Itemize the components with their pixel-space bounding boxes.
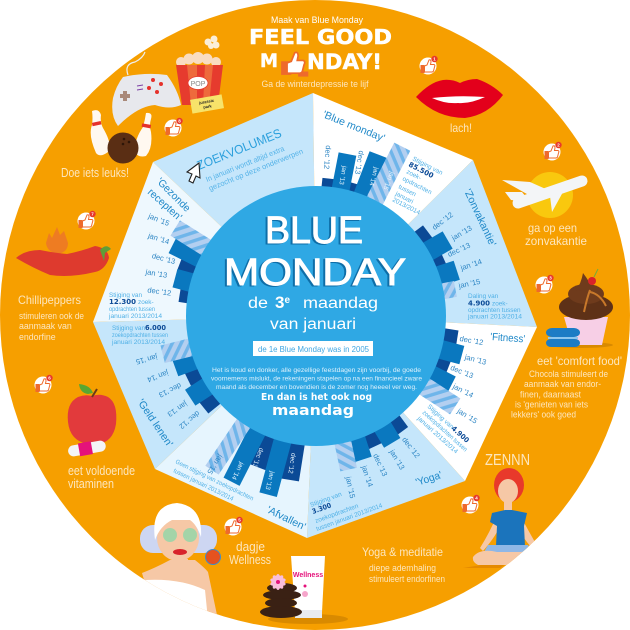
label: doe iets leuks: Doe iets leuks! <box>61 165 129 180</box>
text: comfort food: eet 'comfort food' <box>537 354 622 368</box>
icon: drink <box>206 550 220 564</box>
text: yoga stat: 3.300 <box>311 501 333 516</box>
text: blue monday stat: Stijging van <box>411 156 444 177</box>
title: blue monday <box>224 210 406 294</box>
bar labels: fitness: jan '14 <box>450 381 475 400</box>
text: explanation: Het is koud en donker, alle gezellige feestdagen zijn voorbij, de goede <box>212 367 421 374</box>
icon: thumb badge 8: 8 <box>178 118 181 124</box>
text: comfort food: lekkers' ook goed <box>511 410 576 420</box>
text: explanation: voornemens mislukt, de rekeningen stapelen op na een financieel zware <box>211 376 422 382</box>
bar labels: afvallen: dec '12 <box>286 452 297 474</box>
label: zonvakantie activity <box>525 221 587 248</box>
bar labels: gezonde recepten: jan '15 <box>146 211 171 228</box>
text: yoga stat: Stijging van <box>309 491 343 509</box>
subtitle: third monday of january: van januari <box>270 316 356 333</box>
text: fitness stat: januari 2013/2014 <box>415 415 459 456</box>
bar labels: afvallen: jan '14 <box>230 460 245 481</box>
bars: geld lenen <box>161 331 247 413</box>
heading: gezonde recepten: 'Gezonde <box>154 176 193 215</box>
bar labels: fitness: dec '12 <box>459 334 484 347</box>
text: yoga activity <box>362 545 445 584</box>
callout: first blue monday <box>253 341 373 356</box>
bar labels: geld lenen: dec '12 <box>177 409 202 431</box>
icon: wellness tube and stones: Wellness <box>293 572 323 579</box>
icon: thumb badge 7: 7 <box>91 212 94 216</box>
subtitle: third monday of january: 3 <box>275 293 284 312</box>
icon: thumb badge 3 <box>536 275 554 294</box>
text: zonvakantie stat: Daling van <box>468 293 499 300</box>
panel: fitness <box>316 316 537 481</box>
text: chillipeppers <box>18 293 84 342</box>
icon: popcorn with ticket <box>176 36 224 114</box>
subtitle: third monday of january: maandag <box>303 295 378 312</box>
label: zennn: ZENNN <box>485 452 530 469</box>
bar labels: zonvakantie: dec '12 <box>430 210 455 232</box>
text: comfort food <box>511 354 622 420</box>
heading: feel good monday: M <box>260 50 278 72</box>
icon: apple and pill <box>67 384 116 458</box>
bars: blue monday <box>317 143 410 234</box>
text: chillipeppers: aanmaak van <box>19 321 72 331</box>
bar labels: zonvakantie: jan '15 <box>457 277 481 290</box>
icon: popcorn with ticket: jurassic <box>198 98 215 105</box>
bar labels: yoga <box>344 435 422 499</box>
text: comfort food: is 'genieten van iets <box>515 400 588 410</box>
heading: feel good monday: NDAY! <box>307 50 382 74</box>
heading: afvallen: 'Afvallen' <box>265 504 308 533</box>
bar labels: zonvakantie: jan '13 <box>449 223 473 243</box>
text: yoga stat: zoekopdrachten <box>314 503 360 525</box>
icon: thumb badge 1 <box>420 56 438 74</box>
icon: game controller <box>112 52 181 126</box>
heading: blue monday: 'Blue monday' <box>321 109 387 145</box>
icon: thumb badge 6 <box>34 375 53 394</box>
text: closing line <box>261 392 372 419</box>
icon: meditating woman <box>464 468 534 568</box>
icon: lips <box>416 79 503 118</box>
text: gezonde recepten stat: Stijging van <box>109 292 142 299</box>
icon: thumb badge 5 <box>224 517 243 536</box>
panel: blue monday <box>313 93 473 316</box>
heading: geld lenen: 'Geld lenen' <box>135 397 175 449</box>
label: dagje wellness <box>229 540 271 567</box>
text: comfort food: Chocola stimuleert de <box>529 369 608 379</box>
icon: thumb badge 4 <box>462 495 480 514</box>
text: blue monday stat: 85.500 <box>407 161 435 180</box>
icon: bowling pins and ball <box>91 110 151 164</box>
bar labels: fitness: jan '13 <box>463 352 487 367</box>
icon: thumbs up in title <box>281 52 308 77</box>
icon: wellness tube and stones <box>260 556 348 624</box>
bar labels: fitness: dec '13 <box>449 363 475 380</box>
bars: gezonde recepten <box>169 220 235 310</box>
bars: fitness <box>391 323 464 414</box>
icon: popcorn with ticket: POP <box>191 81 206 88</box>
bar labels: zonvakantie: dec '13 <box>446 241 472 259</box>
heading: feel good monday <box>249 15 392 90</box>
text: closing line: maandag <box>272 403 354 419</box>
bar labels: geld lenen <box>135 352 202 431</box>
text: comfort food: finen, daarnaast <box>520 390 581 400</box>
label: dagje wellness: dagje <box>236 540 265 554</box>
text: blue monday stat: opdrachten <box>401 176 433 197</box>
text: geld lenen stat: Stijging van <box>112 325 145 332</box>
text: blue monday stat: tussen <box>397 184 417 199</box>
text: gezonde recepten stat <box>108 292 162 320</box>
text: chillipeppers: endorfine <box>19 332 56 342</box>
text: fitness stat: zoekopdrachten tussen <box>421 409 469 454</box>
text: zonvakantie stat: zoek- <box>492 300 508 308</box>
heading: yoga: 'Yoga' <box>414 469 444 489</box>
label: vitaminen: vitaminen <box>68 477 114 491</box>
text: yoga stat: tussen januari 2013/2014 <box>315 502 384 533</box>
text: zonvakantie stat: 4.900 <box>468 300 490 308</box>
text: geld lenen stat: zoekopdrachten tussen <box>112 332 168 339</box>
bar labels: zonvakantie <box>430 210 483 290</box>
icon: thumb badge 2: 2 <box>557 142 560 148</box>
text: blue monday stat: januari <box>393 190 414 205</box>
bar labels: gezonde recepten <box>144 211 176 298</box>
icon: thumb badge 2 <box>544 142 562 160</box>
text: closing line: En dan is het ook nog <box>261 392 372 403</box>
icon: thumb badge 6: 6 <box>48 376 51 380</box>
bars: yoga <box>328 387 408 471</box>
label: vitaminen: eet voldoende <box>68 464 135 478</box>
heading: feel good monday: Maak van Blue Monday <box>271 15 363 26</box>
text: fitness stat: 4.900 <box>450 425 471 445</box>
icon: thumb badge 7 <box>78 211 96 230</box>
icon: stacked stones <box>260 583 302 618</box>
text: zonvakantie stat <box>467 293 522 320</box>
icon: chili with flame <box>16 227 111 276</box>
bar labels: gezonde recepten: dec '13 <box>151 251 176 266</box>
panel: gezonde recepten <box>93 162 316 322</box>
icon: spa woman <box>140 503 221 614</box>
title: blue monday: BLUE <box>265 210 363 252</box>
panel: afvallen <box>155 316 316 538</box>
text: geld lenen stat: januari 2013/2014 <box>111 339 165 346</box>
text: chillipeppers: stimuleren ook de <box>19 311 84 321</box>
panel: yoga <box>307 316 465 538</box>
icon: thumb badge 3: 3 <box>549 276 552 280</box>
heading: gezonde recepten: recepten' <box>145 186 184 223</box>
bar labels: gezonde recepten: dec '12 <box>147 285 172 298</box>
text: explanation <box>211 367 422 391</box>
text: zonvakantie stat: januari 2013/2014 <box>467 314 522 320</box>
bar labels: gezonde recepten: jan '14 <box>146 231 171 246</box>
icon: thumb badge 8 <box>164 118 183 136</box>
bar labels: yoga: dec '13 <box>371 452 389 478</box>
bar labels: fitness: jan '15 <box>455 406 479 425</box>
text: gezonde recepten stat: januari 2013/2014 <box>108 313 162 320</box>
subtitle: third monday of january: e <box>284 295 290 306</box>
text: zoekvolumes intro: In januari wordt altijd extra <box>204 144 286 184</box>
bar labels: geld lenen: dec '13 <box>157 381 183 400</box>
label: zonvakantie activity: zonvakantie <box>525 234 587 248</box>
panel: zonvakantie <box>316 160 537 327</box>
bars: zonvakantie <box>383 225 460 306</box>
subtitle: third monday of january <box>248 293 378 333</box>
label: dagje wellness: Wellness <box>229 553 271 567</box>
text: blue monday stat <box>391 156 444 217</box>
panel: geld lenen <box>93 316 316 469</box>
bar labels: blue monday: dec '13 <box>353 150 366 175</box>
bar labels: geld lenen: jan '14 <box>146 368 171 384</box>
icon: thumb badge 4: 4 <box>475 496 478 500</box>
bar labels: fitness <box>449 334 487 425</box>
icon: plane with sun <box>502 172 582 218</box>
subtitle: third monday of january: de <box>248 295 268 312</box>
bar labels: geld lenen: jan '13 <box>166 399 190 419</box>
bar labels: blue monday: dec '12 <box>322 145 333 170</box>
bar labels: afvallen: dec '13 <box>250 447 264 469</box>
bar labels: afvallen: jan '13 <box>264 469 276 491</box>
text: blue monday stat: zoek- <box>405 169 422 182</box>
text: explanation: maand als december en bovendien is de zomer nog heeeel ver weg. <box>216 384 417 391</box>
text: fitness stat: Stijging van <box>426 403 455 431</box>
text: geld lenen stat <box>111 324 168 346</box>
text: zoekvolumes intro: gezocht op deze onderwerpen <box>207 147 304 193</box>
bar labels: zonvakantie: jan '14 <box>458 257 483 273</box>
text: gezonde recepten stat: 12.300 <box>109 298 136 306</box>
heading: feel good monday: Ga de winterdepressie te lijf <box>262 79 369 90</box>
text: geld lenen stat: 6.000 <box>145 324 166 332</box>
bar labels: yoga: dec '12 <box>400 435 422 460</box>
text: chillipeppers: Chillipeppers <box>18 293 81 307</box>
bar labels: gezonde recepten: jan '13 <box>144 267 168 280</box>
callout: first blue monday: de 1e Blue Monday was in 2005 <box>258 345 370 354</box>
text: afvallen stat: tussen januari 2013/2014 <box>172 468 235 503</box>
heading: zonvakantie: 'Zonvakantie' <box>461 187 498 248</box>
label: zonvakantie activity: ga op een <box>528 221 577 235</box>
label: lach: lach! <box>450 121 472 135</box>
icon: thumb badge 5: 5 <box>238 518 241 522</box>
icon: flower <box>269 574 287 590</box>
bar labels: blue monday: jan '13 <box>337 164 348 186</box>
bar labels: blue monday <box>322 145 396 191</box>
bar labels: afvallen <box>205 447 297 491</box>
bar labels: afvallen: jan '15 <box>205 452 225 476</box>
text: yoga activity: diepe ademhaling <box>369 563 436 573</box>
icon: thumb badge 1: 1 <box>433 56 436 62</box>
text: zonvakantie stat: opdrachten tussen <box>468 307 521 314</box>
text: yoga stat <box>309 491 384 533</box>
text: gezonde recepten stat: opdrachten tussen <box>109 306 155 313</box>
icon: cupcake and macaron <box>546 269 613 348</box>
heading: fitness: 'Fitness' <box>490 331 526 345</box>
bar labels: yoga: jan '15 <box>344 475 357 499</box>
heading: gezonde recepten <box>145 176 193 223</box>
text: gezonde recepten stat: zoek- <box>138 299 154 306</box>
text: yoga activity: stimuleert endorfinen <box>369 574 445 584</box>
bars: afvallen <box>205 391 308 497</box>
label: vitaminen <box>68 464 135 491</box>
center circle <box>186 186 446 446</box>
text: blue monday stat: 2013/2014 <box>391 197 422 217</box>
title: blue monday: MONDAY <box>224 252 406 294</box>
icon: popcorn with ticket: park <box>203 103 213 110</box>
text: afvallen stat: Geen stijging van zoekopdrachten <box>174 459 255 503</box>
bar labels: yoga: jan '13 <box>387 447 407 471</box>
text: comfort food: aanmaak van endor- <box>524 379 601 389</box>
icon: mouse cursor <box>187 163 200 183</box>
bar labels: geld lenen: jan '15 <box>135 352 159 366</box>
panel: zoekvolumes <box>153 93 316 316</box>
heading: zoekvolumes: ZOEKVOLUMES <box>195 126 284 173</box>
bar labels: blue monday: jan '15 <box>381 170 396 191</box>
text: yoga activity: Yoga & meditatie <box>362 545 443 559</box>
heading: feel good monday: FEEL GOOD <box>249 25 392 49</box>
bar labels: yoga: jan '14 <box>359 463 375 488</box>
bar labels: blue monday: jan '14 <box>368 165 380 187</box>
